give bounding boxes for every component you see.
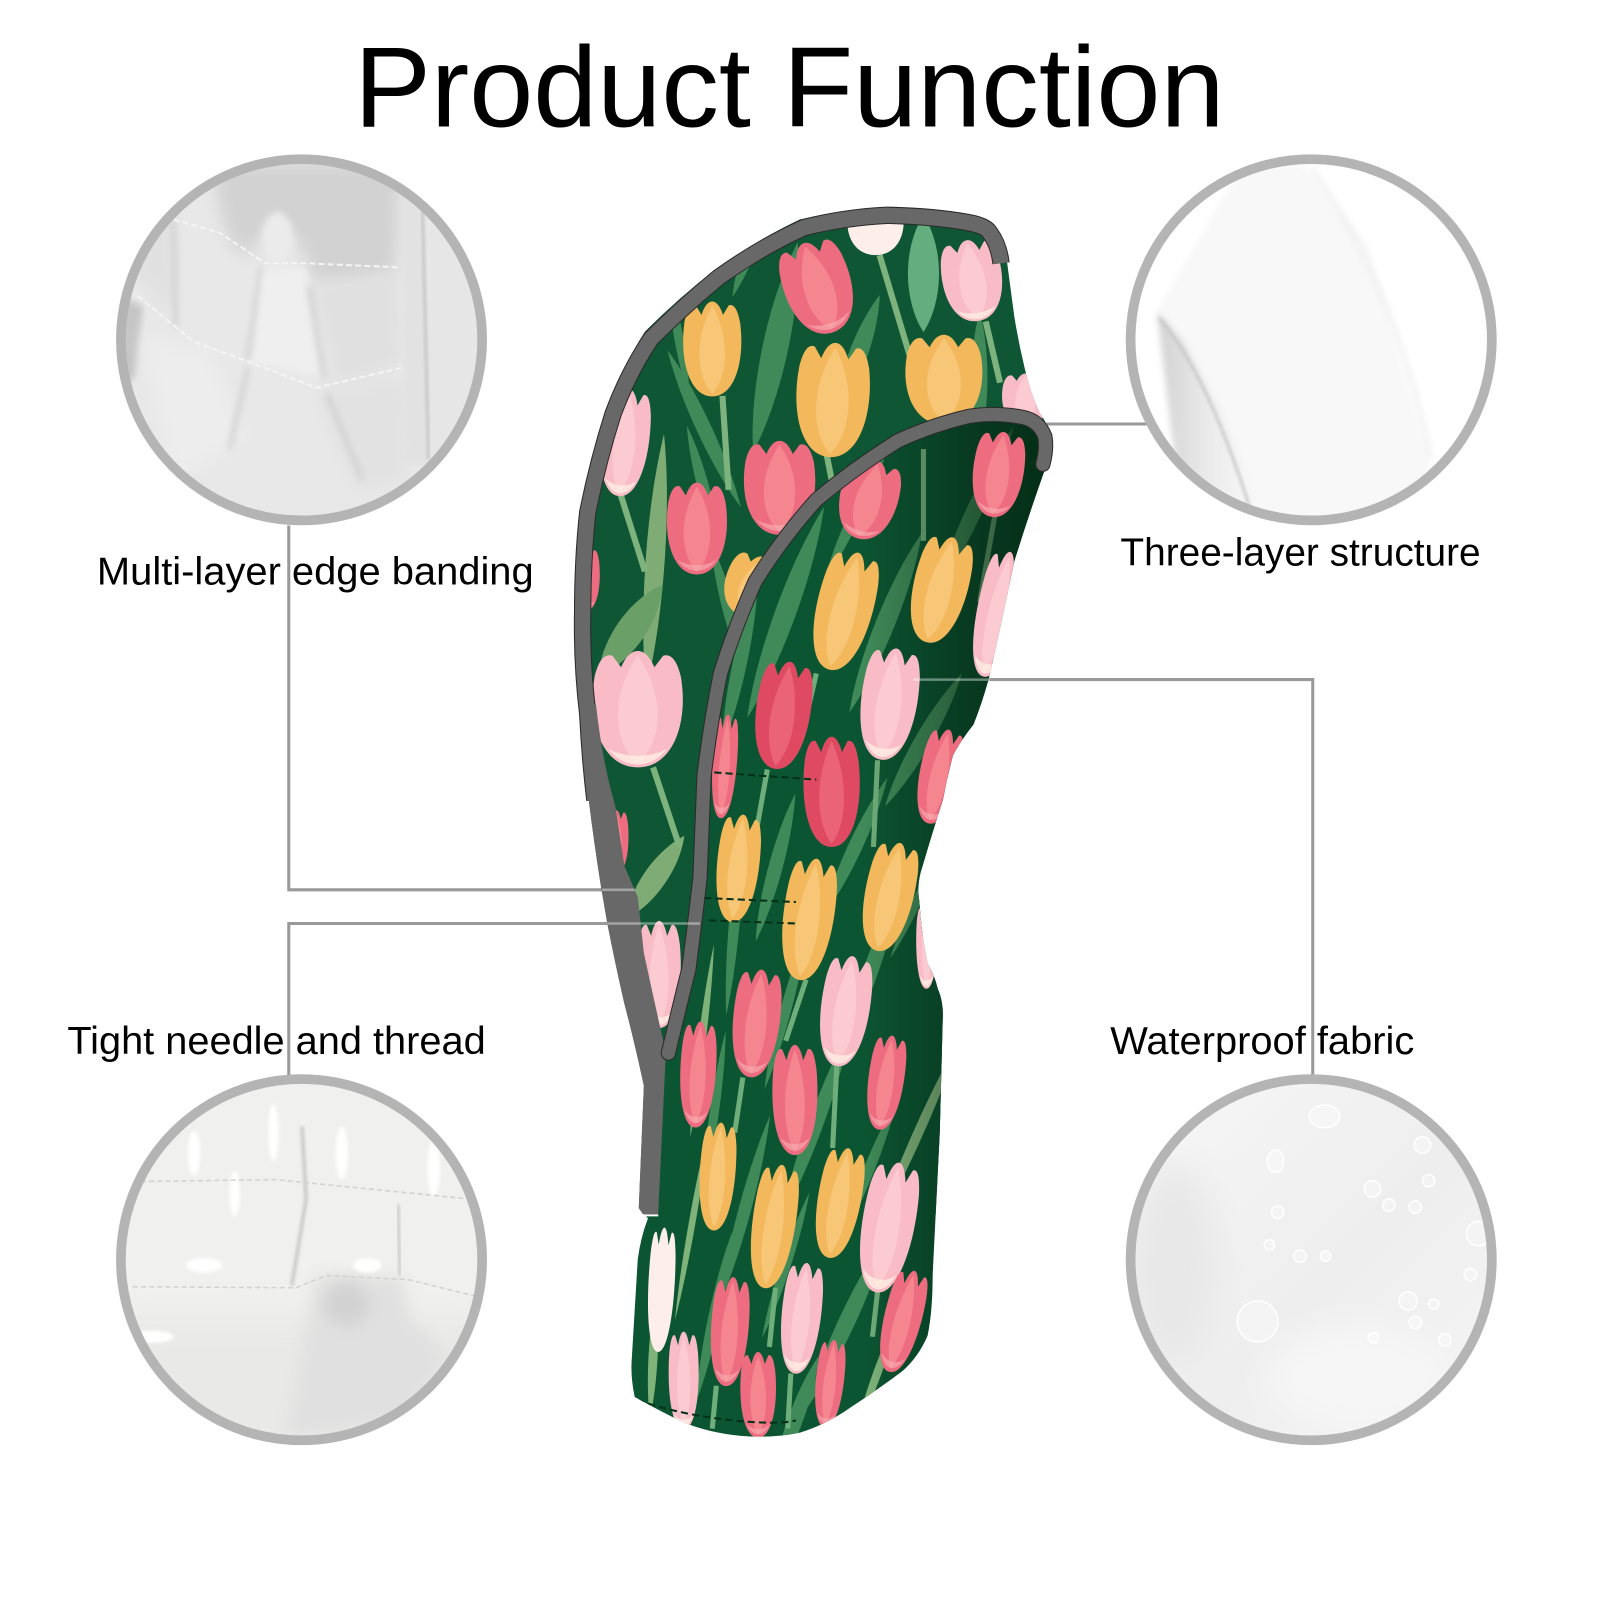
product: tulip print golf headcover — [574, 206, 1054, 1437]
stitching lines — [638, 772, 816, 1423]
upper fabric panel — [588, 216, 1046, 1214]
connector: tight needle and thread — [289, 923, 612, 1077]
lower panel tulips — [645, 429, 1030, 1438]
faint connector overlay on product — [602, 680, 990, 923]
label: waterproof fabric: Waterproof fabric — [1110, 1020, 1414, 1063]
fold creases — [173, 219, 362, 480]
water droplets — [1237, 1105, 1491, 1346]
title: Product Function — [354, 25, 1224, 152]
inner edge binding — [668, 415, 1046, 1053]
upper panel tulips — [572, 198, 1049, 1028]
label: three-layer structure: Three-layer structure — [1120, 531, 1481, 574]
detail circle: three-layer structure — [1122, 153, 1500, 531]
connector: three-layer structure — [1046, 422, 1148, 425]
lower fabric panel — [631, 422, 1044, 1437]
detail circle: waterproof fabric — [1122, 1071, 1500, 1449]
outer edge binding — [583, 215, 1001, 800]
label: tight needle and thread: Tight needle and thread — [67, 1020, 486, 1063]
lower binding band — [581, 704, 665, 1214]
detail circle: tight needle and thread — [112, 1071, 490, 1459]
connector: multi-layer edge banding — [289, 526, 607, 890]
connector: waterproof fabric — [985, 680, 1313, 1077]
detail circle: multi-layer edge banding — [112, 153, 492, 531]
dark shading on fabric — [877, 422, 1044, 1384]
label: multi-layer edge banding: Multi-layer edge banding — [97, 551, 534, 594]
glossy highlights — [133, 1104, 440, 1343]
